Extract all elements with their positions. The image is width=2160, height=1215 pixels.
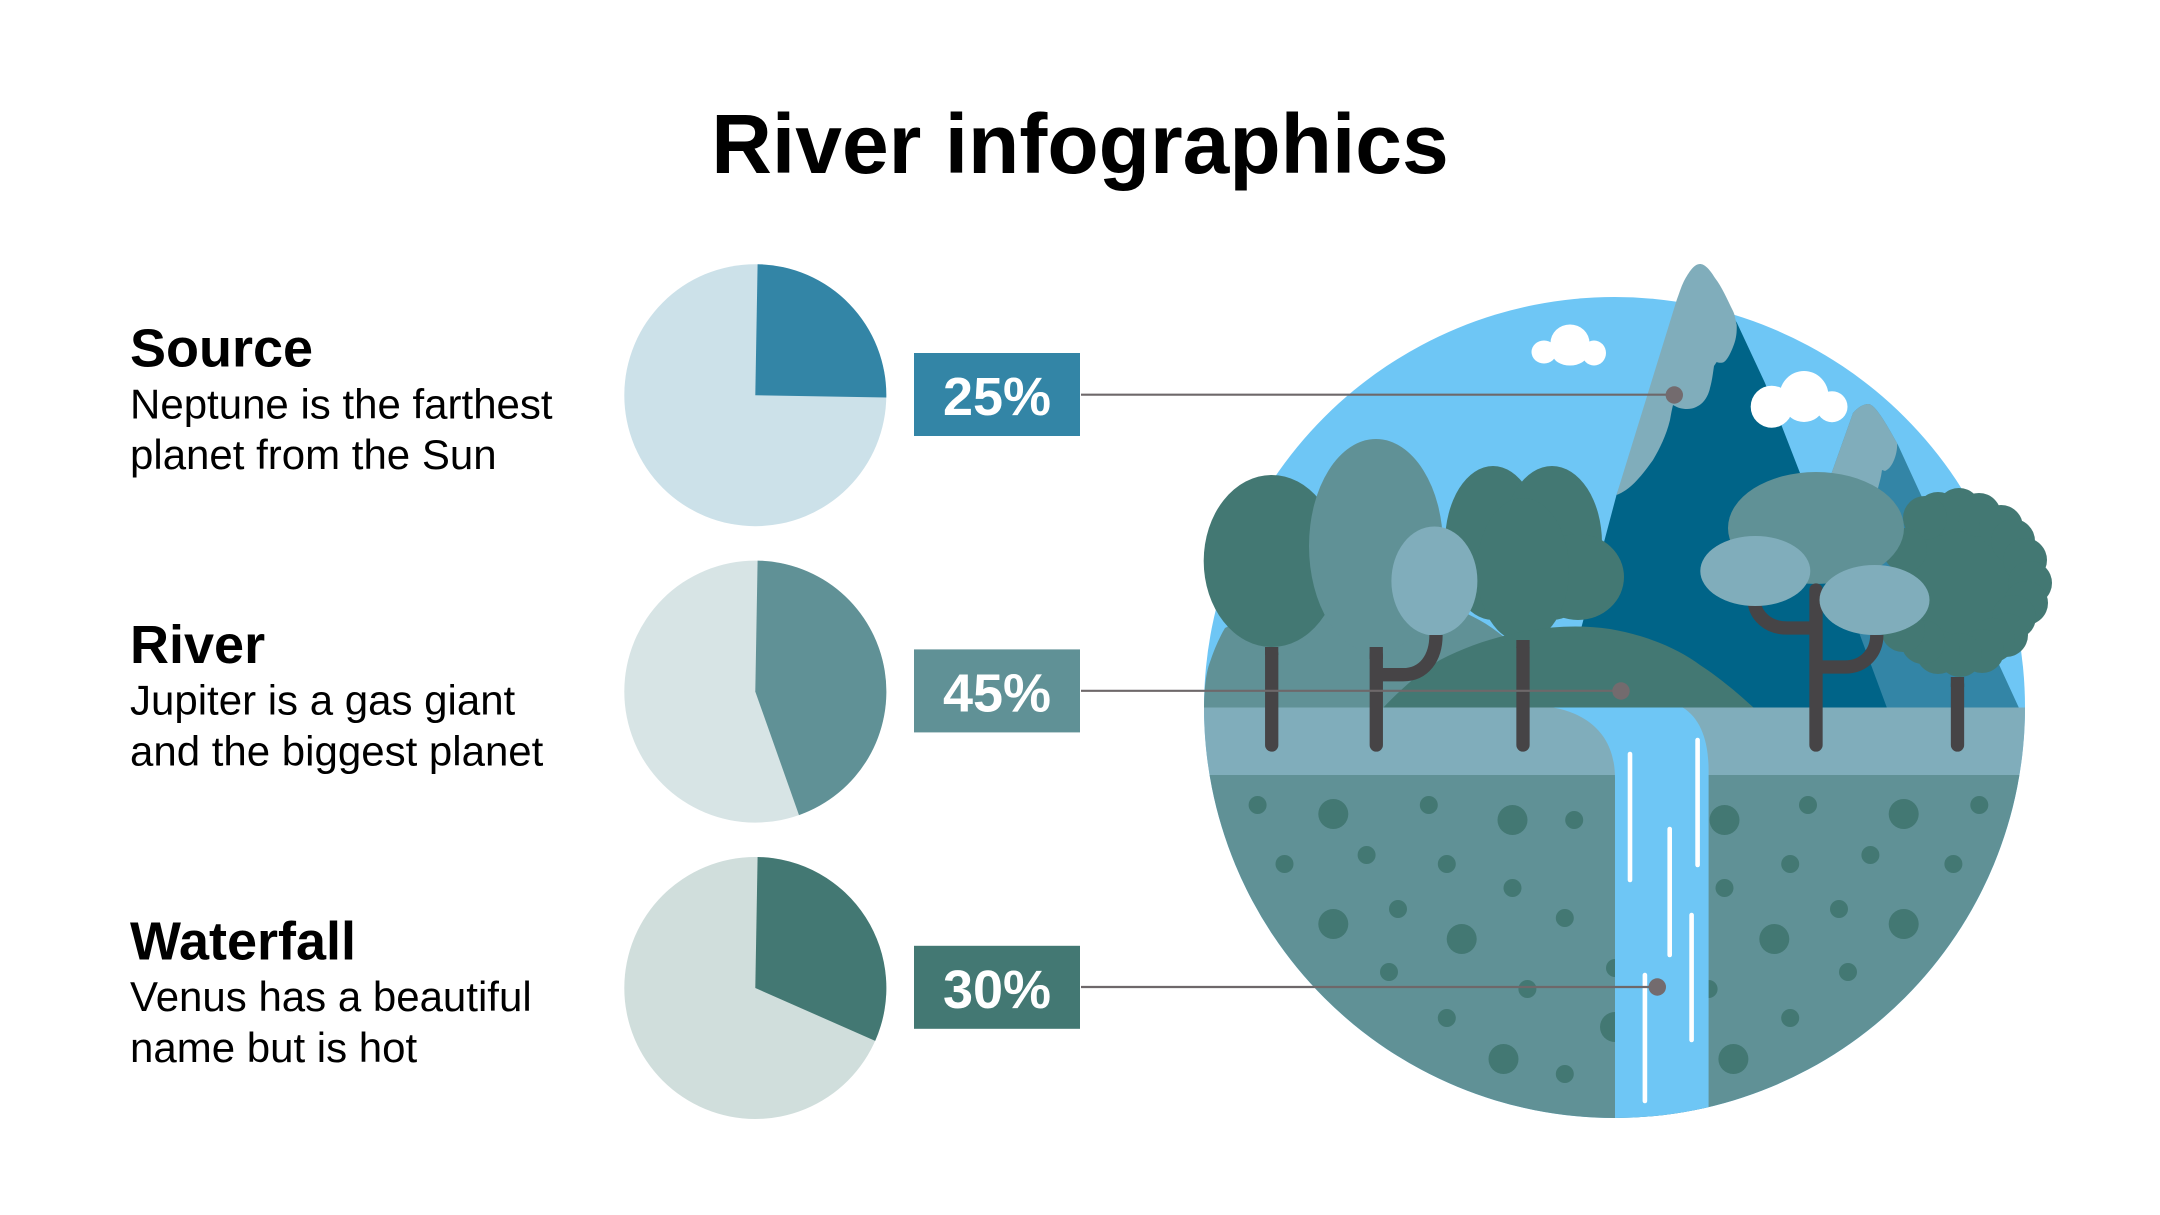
connector: river to hill <box>1081 682 1630 700</box>
percentage box: 25%: 25% <box>943 367 1051 427</box>
heading: river: River <box>130 615 265 675</box>
waterfall <box>1553 708 1709 1125</box>
connector: source to mountain <box>1081 386 1683 404</box>
panel: river text <box>130 615 544 774</box>
tree 4 light canopies <box>1700 536 1930 635</box>
description: waterfall: Venus has a beautiful <box>130 973 532 1020</box>
tree 2 canopy <box>1309 439 1443 653</box>
connector: waterfall <box>1081 978 1666 996</box>
back mountain <box>1750 404 2019 708</box>
pie chart: river 45% <box>624 561 886 823</box>
illustration: river landscape <box>1200 264 2052 1125</box>
heading: waterfall: Waterfall <box>130 911 356 971</box>
main mountain snow cap <box>1616 264 1737 495</box>
percentage box: 45% <box>914 649 1080 732</box>
panel: source text <box>130 318 553 478</box>
pie chart: waterfall 30% <box>624 857 886 1119</box>
tree 5 canopy <box>1878 488 2052 677</box>
percentage box: 30%: 30% <box>943 960 1051 1020</box>
heading: source: Source <box>130 318 313 378</box>
description: river: and the biggest planet <box>130 727 544 774</box>
percentage box: 25% <box>914 353 1080 436</box>
cloud large <box>1751 371 1848 428</box>
percentage box: 30% <box>914 946 1080 1029</box>
ground band <box>1200 708 2030 775</box>
description: source: Neptune is the farthest <box>130 380 553 427</box>
front hill <box>1383 627 1754 708</box>
panel: waterfall text <box>130 911 532 1071</box>
title: River infographics <box>711 97 1449 191</box>
description: river: Jupiter is a gas giant <box>130 677 516 724</box>
tree 1 canopy <box>1204 475 1340 647</box>
back mountain snow cap <box>1826 404 1897 492</box>
waterfall streaks <box>1630 740 1698 1101</box>
description: waterfall: name but is hot <box>130 1024 418 1071</box>
main mountain <box>1556 264 1887 708</box>
tree 2 light canopy <box>1391 526 1477 636</box>
sky <box>1204 297 2025 1118</box>
tree 4 main canopy <box>1728 472 1904 584</box>
percentage box: 45%: 45% <box>943 663 1051 723</box>
tree 3 canopy <box>1445 466 1624 642</box>
soil with stones <box>1200 775 2030 1125</box>
trunk tops <box>1265 640 1964 687</box>
tree trunks and branches <box>1272 590 1958 745</box>
pie chart: source 25% <box>624 264 886 526</box>
description: source: planet from the Sun <box>130 431 497 478</box>
back hill <box>1204 596 1558 708</box>
cloud small <box>1532 324 1606 366</box>
